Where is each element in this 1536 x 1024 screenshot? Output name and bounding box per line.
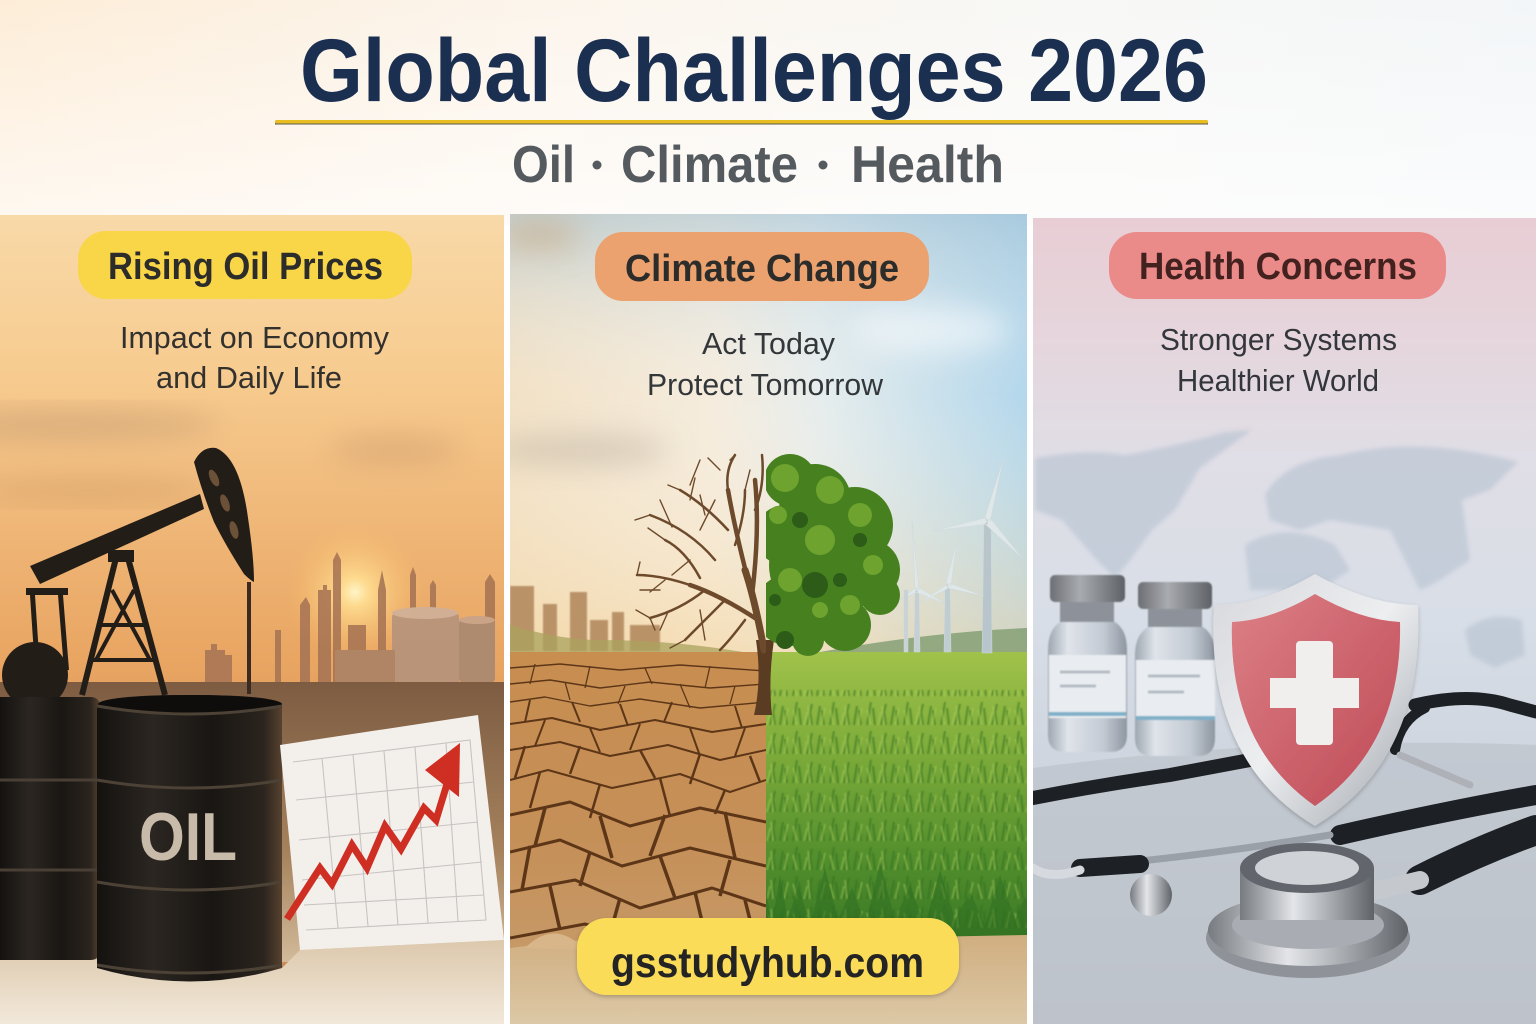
panel: climate change xyxy=(490,214,1027,1024)
heading pill: rising oil prices: Rising Oil Prices xyxy=(108,246,383,288)
dead branches xyxy=(635,455,764,650)
city skyline xyxy=(510,586,660,651)
dry cracked earth xyxy=(510,652,766,948)
green foliage xyxy=(754,454,900,656)
arrow: price rise xyxy=(287,743,460,919)
text: climate tagline: Act Today xyxy=(702,326,835,361)
heading pill: health concerns xyxy=(1109,232,1446,299)
chart: rising price graph xyxy=(280,715,504,950)
sandy foreground xyxy=(510,935,1027,1024)
subtitle: Climate xyxy=(621,136,798,194)
refinery skyline xyxy=(205,552,495,690)
text: oil tagline: and Daily Life xyxy=(156,360,342,395)
heading pill: rising oil prices xyxy=(78,231,412,299)
subtitle: Health xyxy=(851,136,1004,194)
icon: stethoscope tubing xyxy=(1033,698,1536,892)
text: oil tagline xyxy=(122,327,389,394)
website badge: gsstudyhub.com xyxy=(611,939,924,987)
barrel label: OIL xyxy=(139,799,237,875)
text: health tagline xyxy=(1161,328,1396,392)
sun xyxy=(306,546,404,644)
heading pill: climate change: Climate Change xyxy=(625,248,899,290)
text: oil tagline: Impact on Economy xyxy=(120,320,389,355)
panel: rising oil prices xyxy=(0,215,504,1024)
clouds: climate panel xyxy=(490,219,1010,466)
subtitle xyxy=(512,136,1004,194)
subtitle: Oil xyxy=(512,136,575,194)
title underline xyxy=(275,120,1208,124)
text: health tagline: Healthier World xyxy=(1177,363,1379,398)
horizon hills xyxy=(820,628,1027,654)
header background xyxy=(0,0,1536,225)
icon: stethoscope chest piece xyxy=(1206,843,1410,978)
panel: health concerns xyxy=(1033,218,1536,1024)
icon: oil pumpjack xyxy=(2,448,254,708)
icon: ear tip xyxy=(1130,874,1172,916)
icon: red cross shield xyxy=(1213,574,1418,826)
icon: oil barrels xyxy=(0,695,282,985)
icon: vaccine vials xyxy=(1048,575,1215,756)
heading pill: climate change xyxy=(595,232,929,301)
text: climate tagline xyxy=(649,332,884,396)
website badge xyxy=(577,918,959,995)
icon: half dead half green tree xyxy=(635,454,900,715)
text: health tagline: Stronger Systems xyxy=(1160,322,1397,357)
table surface xyxy=(1033,742,1536,902)
table xyxy=(0,940,504,1024)
heading pill: health concerns: Health Concerns xyxy=(1139,246,1417,288)
icon: wind turbines xyxy=(900,460,1022,653)
green grass field xyxy=(766,652,1027,940)
world map xyxy=(1035,430,1525,668)
clouds: oil panel xyxy=(0,409,460,500)
ground xyxy=(0,682,504,962)
text: climate tagline: Protect Tomorrow xyxy=(647,367,884,402)
title: Global Challenges 2026 xyxy=(300,20,1208,120)
